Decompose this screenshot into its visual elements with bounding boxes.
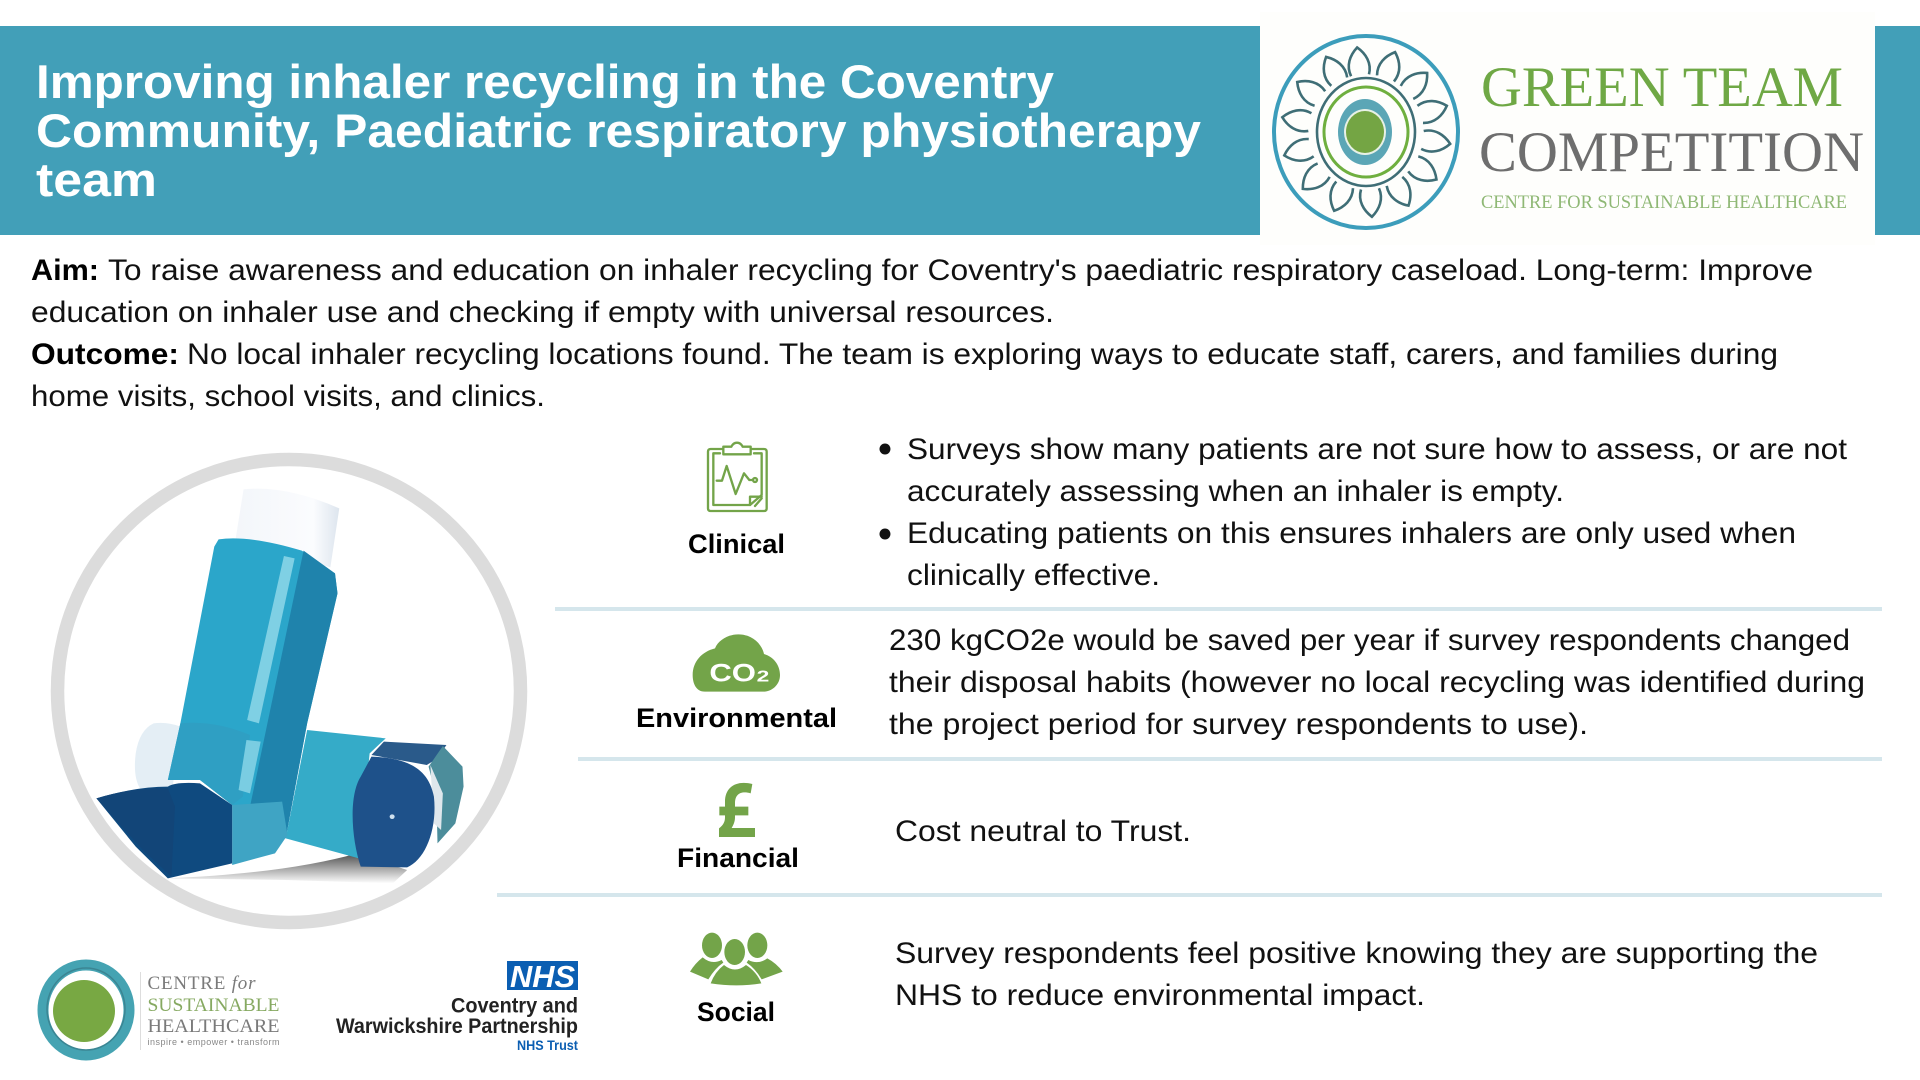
text block: aim and outcome: Aim: [31,254,99,287]
row: social [690,933,1818,1027]
bulleted text [880,433,1848,592]
icon: CO2 cloud: 2 [757,669,769,686]
bulleted text: Educating patients on this ensures inhalers are only used when [907,517,1796,550]
text block: 230 kgCO2e would be saved per year if survey respondents changed [889,624,1850,657]
label: Clinical [688,529,785,559]
wordmark: SUSTAINABLE [148,995,280,1016]
logo: NHS Coventry and Warwickshire Partnership: Warwickshire Partnership [336,1015,578,1038]
text block: aim and outcome: home visits, school visits, and clinics. [31,380,545,413]
icon: CO2 cloud [693,634,780,692]
title: Improving inhaler recycling in the Coventry [36,55,1054,108]
illustration: inhalers [96,489,464,883]
wordmark: inspire • empower • transform [148,1037,280,1047]
logo wordmark: CENTRE FOR SUSTAINABLE HEALTHCARE [1481,192,1847,213]
text block [895,937,1818,1012]
wordmark: HEALTHCARE [148,1016,280,1037]
title: team [36,153,157,206]
logo: Centre for Sustainable Healthcare [43,965,280,1055]
wordmark: CENTRE for [148,973,256,994]
logo wordmark: GREEN TEAM [1481,56,1843,119]
label: Environmental [636,703,837,733]
text block: aim and outcome: To raise awareness and education on inhaler recycling for Coventry's paediatric respiratory caseload. Long-term: Improve [108,254,1813,287]
logo wordmark [1479,56,1864,213]
logo wordmark: COMPETITION [1479,121,1864,184]
text block: aim and outcome: Outcome: [31,338,179,371]
icon: green circle emblem [43,965,129,1055]
bulleted text: accurately assessing when an inhaler is empty. [907,475,1564,508]
logo: Green Team Competition [1260,12,1875,245]
title [36,55,1201,206]
text block: their disposal habits (however no local recycling was identified during [889,666,1865,699]
bulleted text: clinically effective. [907,559,1160,592]
logo: NHS Coventry and Warwickshire Partnership: NHS Trust [517,1037,578,1053]
row: financial [677,783,1191,873]
text: Cost neutral to Trust. [895,815,1191,848]
text block: NHS to reduce environmental impact. [895,979,1425,1012]
icon: pound sign [719,783,755,837]
text block: Survey respondents feel positive knowing they are supporting the [895,937,1818,970]
icon: CO2 cloud: CO [709,660,756,688]
text block: aim and outcome [31,254,1813,413]
logo: NHS Coventry and Warwickshire Partnership: Coventry and [451,994,578,1018]
row: clinical [688,433,1848,592]
title: Community, Paediatric respiratory physiotherapy [36,104,1201,157]
icon: sunburst emblem [1274,36,1458,228]
logo: NHS Coventry and Warwickshire Partnership: NHS [510,959,575,994]
wordmark [148,973,280,1047]
header banner [0,26,1920,235]
text block: the project period for survey respondents to use). [889,708,1588,741]
icon: group of people [690,933,783,985]
text block: aim and outcome: education on inhaler use and checking if empty with universal resources. [31,296,1054,329]
label: Social [697,997,775,1027]
icon: clipboard with heartbeat [708,443,767,511]
label: Financial [677,843,799,873]
text block: aim and outcome: No local inhaler recycling locations found. The team is exploring ways to educate staff, carers, and families during [187,338,1778,371]
logo: NHS Coventry and Warwickshire Partnership [336,959,578,1053]
row: environmental [636,624,1865,741]
text block [889,624,1865,741]
bulleted text: Surveys show many patients are not sure how to assess, or are not [907,433,1848,466]
inhaler image in circular frame [58,460,520,922]
